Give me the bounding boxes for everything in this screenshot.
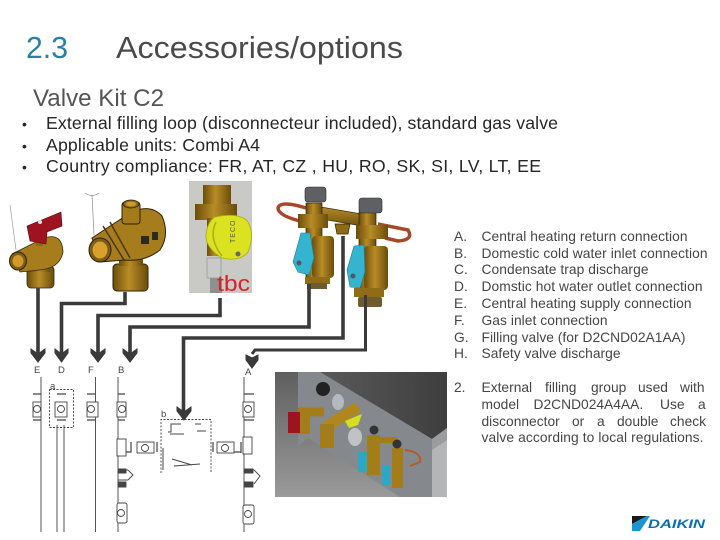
note 2: external filling group: check xyxy=(670,414,706,429)
bullet list: kit details: External filling loop (disconnecteur included), standard gas valve xyxy=(46,113,558,133)
subtitle: Valve Kit C2 xyxy=(33,85,164,112)
icon: brass angle valve xyxy=(85,193,166,291)
pumps xyxy=(117,503,127,523)
arrow: left shut-off valve to B xyxy=(123,284,309,362)
bullet list: kit details: • xyxy=(22,116,27,132)
schematic labels: A xyxy=(245,367,252,378)
photo: yellow gas valve (tbc) xyxy=(189,181,252,296)
schematic labels xyxy=(34,365,252,420)
note 2: external filling group: External xyxy=(482,380,532,395)
schematic labels: a xyxy=(50,381,56,392)
note 2: external filling group xyxy=(454,380,706,445)
arrow: valve to E xyxy=(31,288,45,362)
photo: yellow gas valve (tbc): TECO xyxy=(230,220,237,243)
arrow: right shut-off valve to A xyxy=(246,295,366,368)
list: connections A to H: Domestic cold water inlet connection xyxy=(482,246,708,261)
icon: red-handle valve xyxy=(10,205,63,288)
note 2: external filling group: group xyxy=(591,380,627,395)
note 2: external filling group: used xyxy=(638,380,668,395)
list: connections A to H: A. xyxy=(454,229,467,244)
arrows from components to schematic connections xyxy=(31,236,366,420)
note 2: external filling group: a xyxy=(597,414,605,429)
note 2: external filling group: with xyxy=(679,380,705,395)
list: connections A to H: Condensate trap discharge xyxy=(482,262,649,277)
arrow: filling connection to b xyxy=(177,236,343,420)
photo: valve kit installed on boiler xyxy=(275,372,447,497)
note 2: external filling group: model xyxy=(482,397,519,412)
list: connections A to H: Central heating return connection xyxy=(482,229,688,244)
side valves xyxy=(117,437,252,456)
logo: Daikin xyxy=(632,516,706,531)
logo: Daikin: DAIKIN xyxy=(648,519,706,531)
bullet list: kit details: Applicable units: Combi A4 xyxy=(46,135,260,155)
title: Accessories/options xyxy=(116,30,403,65)
list: connections A to H: Gas inlet connection xyxy=(482,313,608,328)
note 2: external filling group: or xyxy=(572,414,585,429)
schematic labels: b xyxy=(161,409,166,420)
bullet list: kit details: Country compliance: FR, AT, CZ , HU, RO, SK, SI, LV, LT, EE xyxy=(46,156,541,176)
icon: twin shut-off valves with blue handles xyxy=(278,187,410,307)
list: connections A to H: G. xyxy=(454,330,469,345)
schematic labels: F xyxy=(88,365,94,376)
schematic labels: D xyxy=(58,365,65,376)
note 2: external filling group: D2CND024A4AA. xyxy=(534,397,643,412)
note 2: external filling group: a xyxy=(698,397,706,412)
check valves xyxy=(118,470,260,484)
list: connections A to H: F. xyxy=(454,313,465,328)
note 2: external filling group: Use xyxy=(660,397,685,412)
list: connections A to H xyxy=(454,229,708,361)
bullet list: kit details xyxy=(22,113,558,176)
hydraulic schematic xyxy=(33,365,260,532)
bullet list: kit details: • xyxy=(22,138,27,154)
list: connections A to H: Safety valve discharge xyxy=(482,346,621,361)
component b box xyxy=(161,420,211,473)
list: connections A to H: Central heating supply connection xyxy=(482,296,692,311)
note 2: external filling group: valve according to local regulations. xyxy=(482,430,704,445)
note 2: external filling group: disconnector xyxy=(482,414,560,429)
arrow: gas valve to F xyxy=(91,298,220,362)
schematic labels: E xyxy=(34,365,40,376)
list: connections A to H: D. xyxy=(454,279,468,294)
note 2: external filling group: double xyxy=(617,414,659,429)
note 2: external filling group: filling xyxy=(545,380,576,395)
list: connections A to H: C. xyxy=(454,262,468,277)
note 2: external filling group: 2. xyxy=(454,380,466,395)
list: connections A to H: H. xyxy=(454,346,468,361)
list: connections A to H: Filling valve (for D2CND02A1AA) xyxy=(482,330,686,345)
bullet list: kit details: • xyxy=(22,159,27,175)
tbc label: tbc xyxy=(217,271,250,296)
row of isolating valves xyxy=(33,402,254,417)
schematic labels: B xyxy=(118,365,124,376)
list: connections A to H: Domstic hot water outlet connection xyxy=(482,279,702,294)
list: connections A to H: E. xyxy=(454,296,467,311)
arrow: valve to D xyxy=(55,292,125,362)
title: 2.3 xyxy=(26,30,68,65)
list: connections A to H: B. xyxy=(454,246,467,261)
